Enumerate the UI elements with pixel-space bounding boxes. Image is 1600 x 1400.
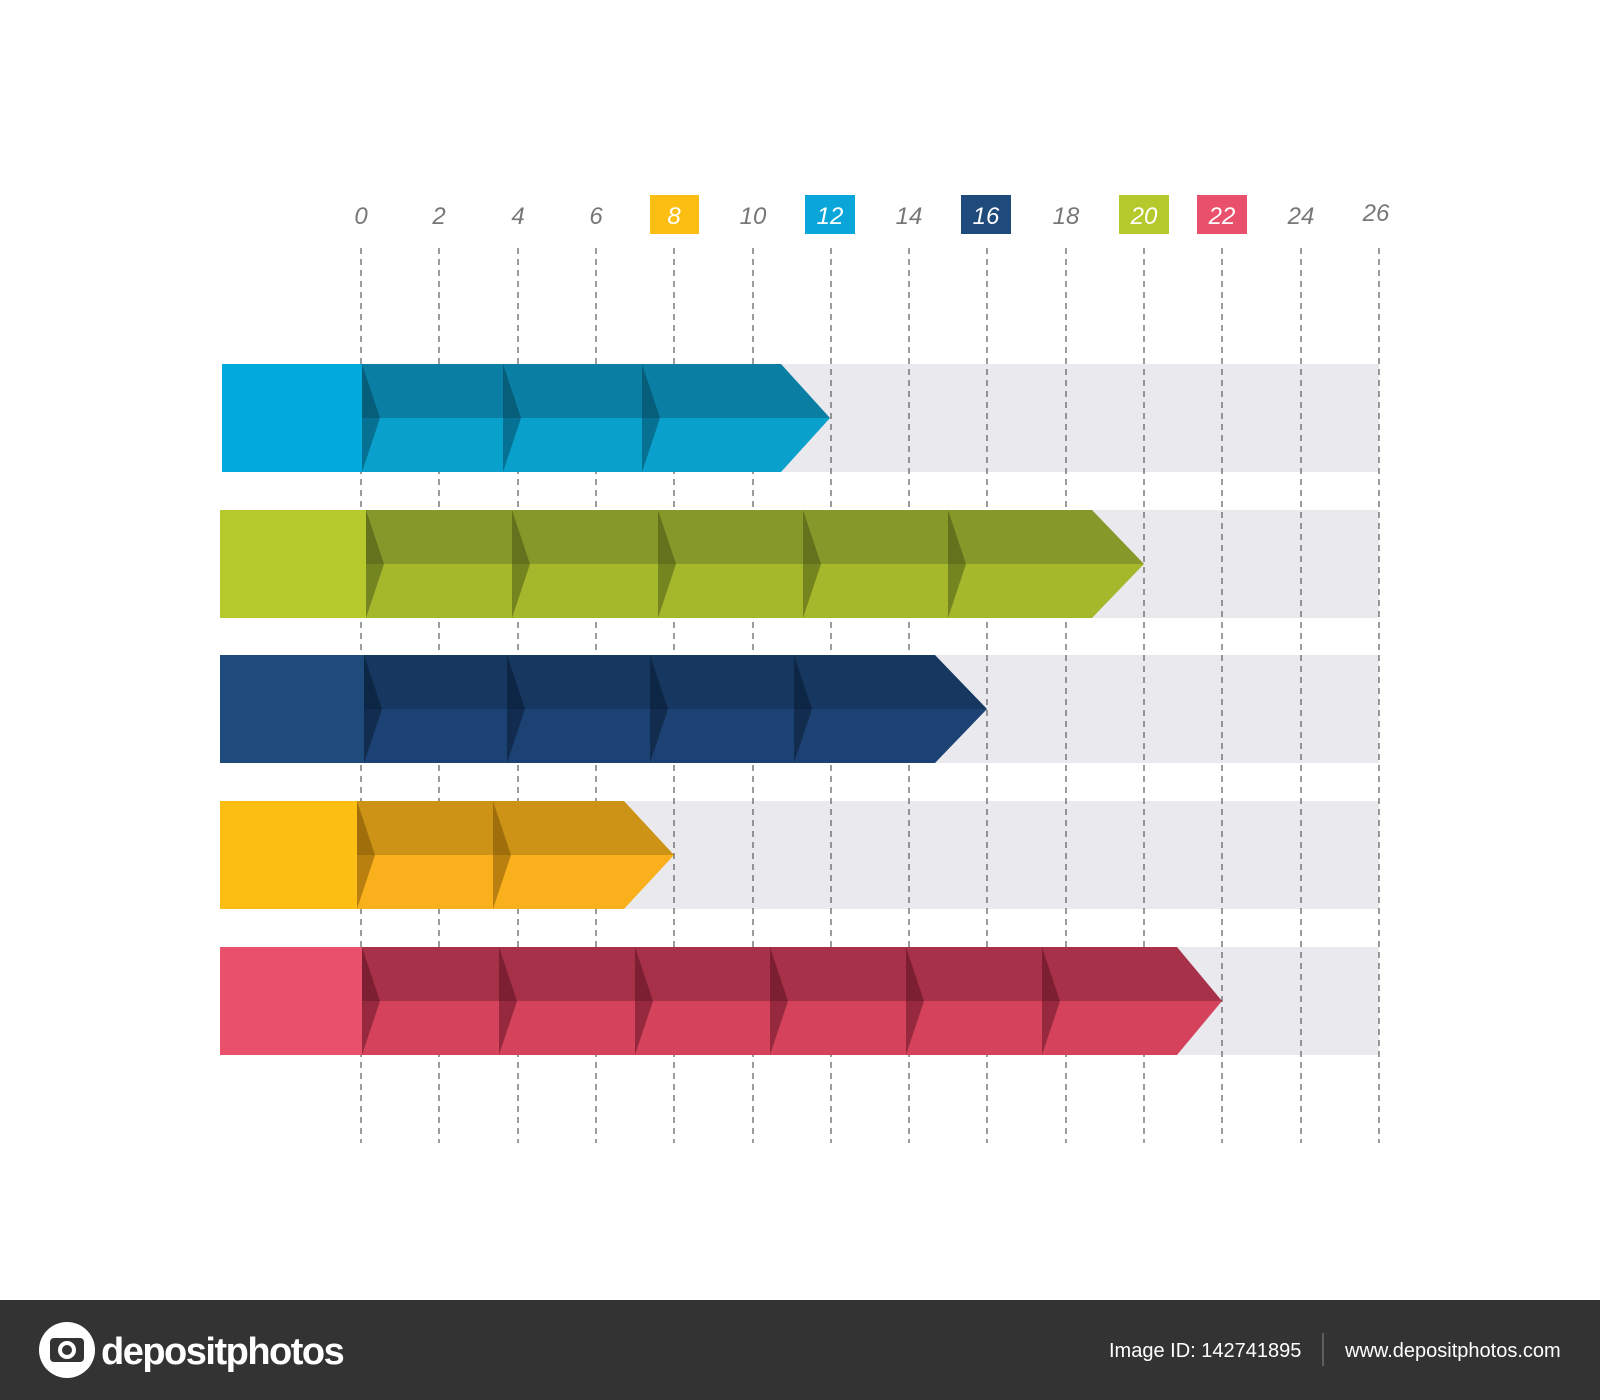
axis labels: 22 [1208, 203, 1235, 230]
bar 1: blue [222, 364, 830, 472]
axis labels: 18 [1053, 203, 1080, 230]
axis labels: 6 [589, 203, 603, 230]
bar 5: red [220, 947, 1222, 1055]
axis labels: 8 [667, 203, 681, 230]
axis labels: 20 [1130, 203, 1158, 230]
footer bar [0, 1300, 1600, 1400]
website: www.depositphotos.com [1344, 1340, 1561, 1362]
bar 4: yellow [220, 801, 674, 909]
bar 2: green [220, 510, 1144, 618]
axis labels: 12 [817, 203, 843, 230]
axis labels: 16 [973, 203, 1000, 230]
axis labels: 2 [431, 203, 446, 230]
grid lines [361, 248, 1379, 1143]
logo text: depositphotos [101, 1331, 344, 1373]
icon: camera logo [39, 1322, 95, 1378]
axis labels: 4 [511, 203, 525, 230]
bar 3: navy [220, 655, 987, 763]
background bands [220, 364, 1379, 1055]
axis labels: 10 [740, 203, 767, 230]
axis labels: 0 [354, 203, 368, 230]
axis labels [354, 195, 1390, 234]
axis labels: 26 [1362, 200, 1390, 227]
image id: Image ID: 142741895 [1109, 1340, 1301, 1362]
axis labels: 24 [1287, 203, 1314, 230]
axis labels: 14 [896, 203, 922, 230]
